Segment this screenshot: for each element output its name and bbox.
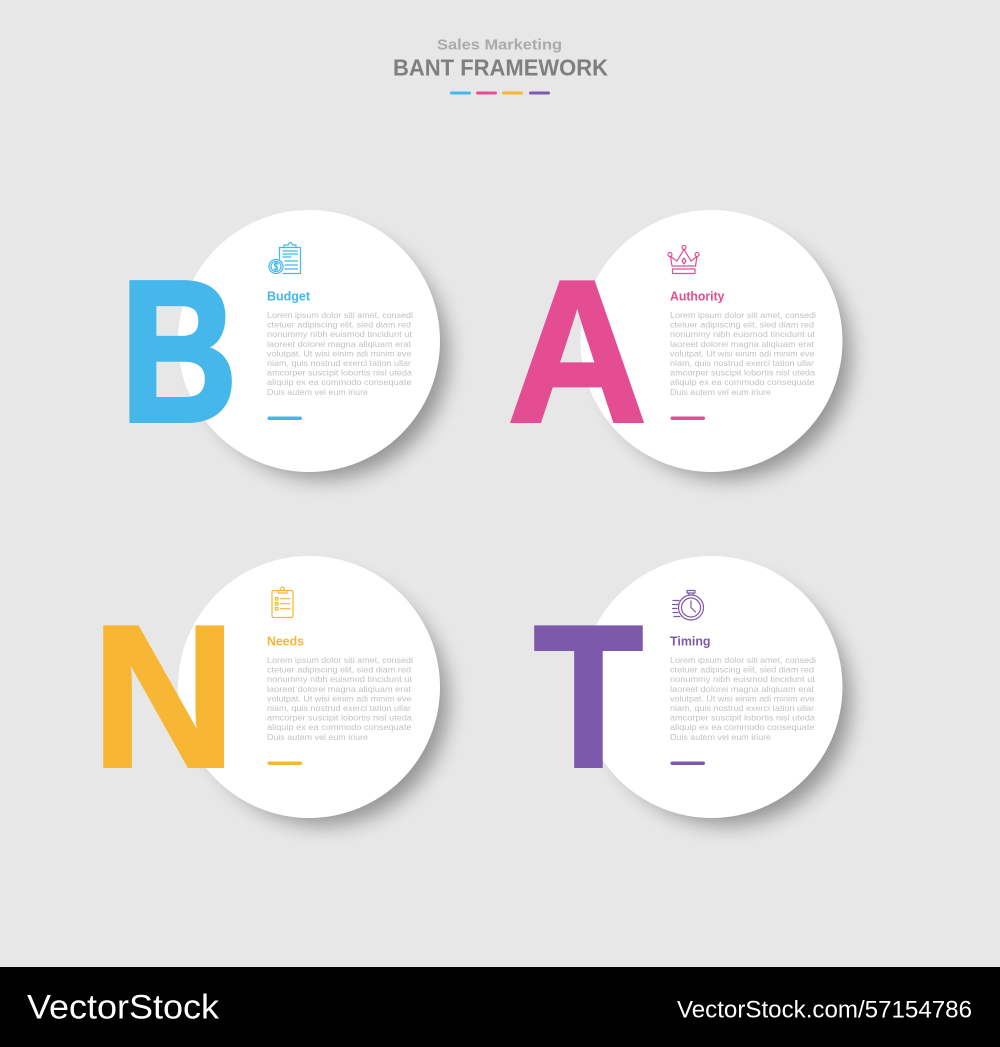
letter T: T bbox=[534, 582, 643, 810]
body text: niam, quis nostrud exerci tation ullar bbox=[670, 703, 814, 713]
body text: nonummy nibh euismod tincidunt ut bbox=[267, 329, 413, 339]
body text: ctetuer adipiscing elit, sied diam red bbox=[267, 320, 411, 330]
body text: laoreet dolorei magna aliqiuam erat bbox=[670, 684, 815, 694]
body text: nonummy nibh euismod tincidunt ut bbox=[267, 674, 413, 684]
body text: niam, quis nostrud exerci tation ullar bbox=[670, 358, 814, 368]
body text: volutpat. Ut wisi einim adi minim eve bbox=[267, 693, 412, 703]
footer watermark bar bbox=[0, 967, 1000, 1047]
body text: ctetuer adipiscing elit, sied diam red bbox=[267, 665, 411, 675]
panel: budget bbox=[120, 210, 448, 479]
body text: niam, quis nostrud exerci tation ullar bbox=[267, 703, 411, 713]
heading: Needs bbox=[267, 634, 304, 648]
body text: volutpat. Ut wisi einim adi minim eve bbox=[670, 348, 815, 358]
watermark url: VectorStock.com/57154786 bbox=[677, 996, 972, 1024]
heading: Timing bbox=[670, 634, 710, 648]
body text bbox=[670, 310, 816, 397]
accent bar bbox=[268, 762, 302, 765]
body text: amcorper suscipit lobortis nisl uteda bbox=[267, 713, 412, 723]
heading: Budget bbox=[267, 290, 311, 304]
accent bar bbox=[670, 762, 705, 765]
body text: Lorem ipsum dolor siti amet, consedi bbox=[670, 310, 816, 320]
accent bar bbox=[670, 416, 705, 420]
body text: Lorem ipsum dolor siti amet, consedi bbox=[267, 655, 413, 665]
body text: laoreet dolorei magna aliqiuam erat bbox=[267, 684, 412, 694]
panel: needs bbox=[91, 556, 448, 825]
body text: aliquip ex ea commodo consequate bbox=[267, 377, 412, 387]
heading: Authority bbox=[670, 290, 725, 304]
card shadow bbox=[200, 577, 448, 825]
watermark logo: VectorStock bbox=[27, 988, 220, 1026]
body text: aliquip ex ea commodo consequate bbox=[670, 377, 815, 387]
body text: amcorper suscipit lobortis nisl uteda bbox=[670, 713, 815, 723]
subtitle: Sales Marketing bbox=[437, 36, 562, 54]
icon: budget clipboard and coin bbox=[269, 242, 300, 274]
body text: laoreet dolorei magna aliqiuam erat bbox=[267, 339, 412, 349]
card shadow bbox=[200, 231, 448, 479]
accent bar bbox=[268, 416, 302, 420]
body text: laoreet dolorei magna aliqiuam erat bbox=[670, 339, 815, 349]
body text: niam, quis nostrud exerci tation ullar bbox=[267, 358, 411, 368]
body text: Duis autem vel eum iriure bbox=[267, 387, 368, 397]
body text: aliquip ex ea commodo consequate bbox=[267, 722, 412, 732]
body text bbox=[670, 655, 816, 742]
body text: Lorem ipsum dolor siti amet, consedi bbox=[670, 655, 816, 665]
body text: nonummy nibh euismod tincidunt ut bbox=[670, 674, 816, 684]
body text: volutpat. Ut wisi einim adi minim eve bbox=[670, 693, 815, 703]
body text: ctetuer adipiscing elit, sied diam red bbox=[670, 665, 814, 675]
card circle bbox=[580, 210, 842, 472]
card shadow bbox=[602, 231, 850, 479]
body text: nonummy nibh euismod tincidunt ut bbox=[670, 329, 816, 339]
card shadow bbox=[602, 577, 850, 825]
body text: aliquip ex ea commodo consequate bbox=[670, 722, 815, 732]
body text: ctetuer adipiscing elit, sied diam red bbox=[670, 320, 814, 330]
card circle bbox=[178, 210, 440, 472]
card circle bbox=[580, 556, 842, 818]
colour dashes bbox=[450, 92, 550, 94]
body text: Duis autem vel eum iriure bbox=[267, 732, 368, 742]
panel: authority bbox=[507, 210, 850, 479]
letter A: A bbox=[507, 238, 647, 465]
body text: Duis autem vel eum iriure bbox=[670, 387, 771, 397]
panel: timing bbox=[534, 556, 850, 825]
title block bbox=[393, 36, 608, 94]
body text: Lorem ipsum dolor siti amet, consedi bbox=[267, 310, 413, 320]
body text: amcorper suscipit lobortis nisl uteda bbox=[670, 368, 815, 378]
body text: Duis autem vel eum iriure bbox=[670, 732, 771, 742]
icon: stopwatch bbox=[672, 590, 704, 620]
icon: checklist clipboard bbox=[272, 587, 293, 618]
letter N: N bbox=[91, 582, 236, 810]
body text bbox=[267, 655, 413, 742]
body text: amcorper suscipit lobortis nisl uteda bbox=[267, 368, 412, 378]
title: BANT FRAMEWORK bbox=[393, 54, 608, 80]
card circle bbox=[178, 556, 440, 818]
body text bbox=[267, 310, 413, 397]
body text: volutpat. Ut wisi einim adi minim eve bbox=[267, 348, 412, 358]
icon: crown bbox=[668, 246, 699, 274]
letter B: B bbox=[120, 239, 237, 464]
